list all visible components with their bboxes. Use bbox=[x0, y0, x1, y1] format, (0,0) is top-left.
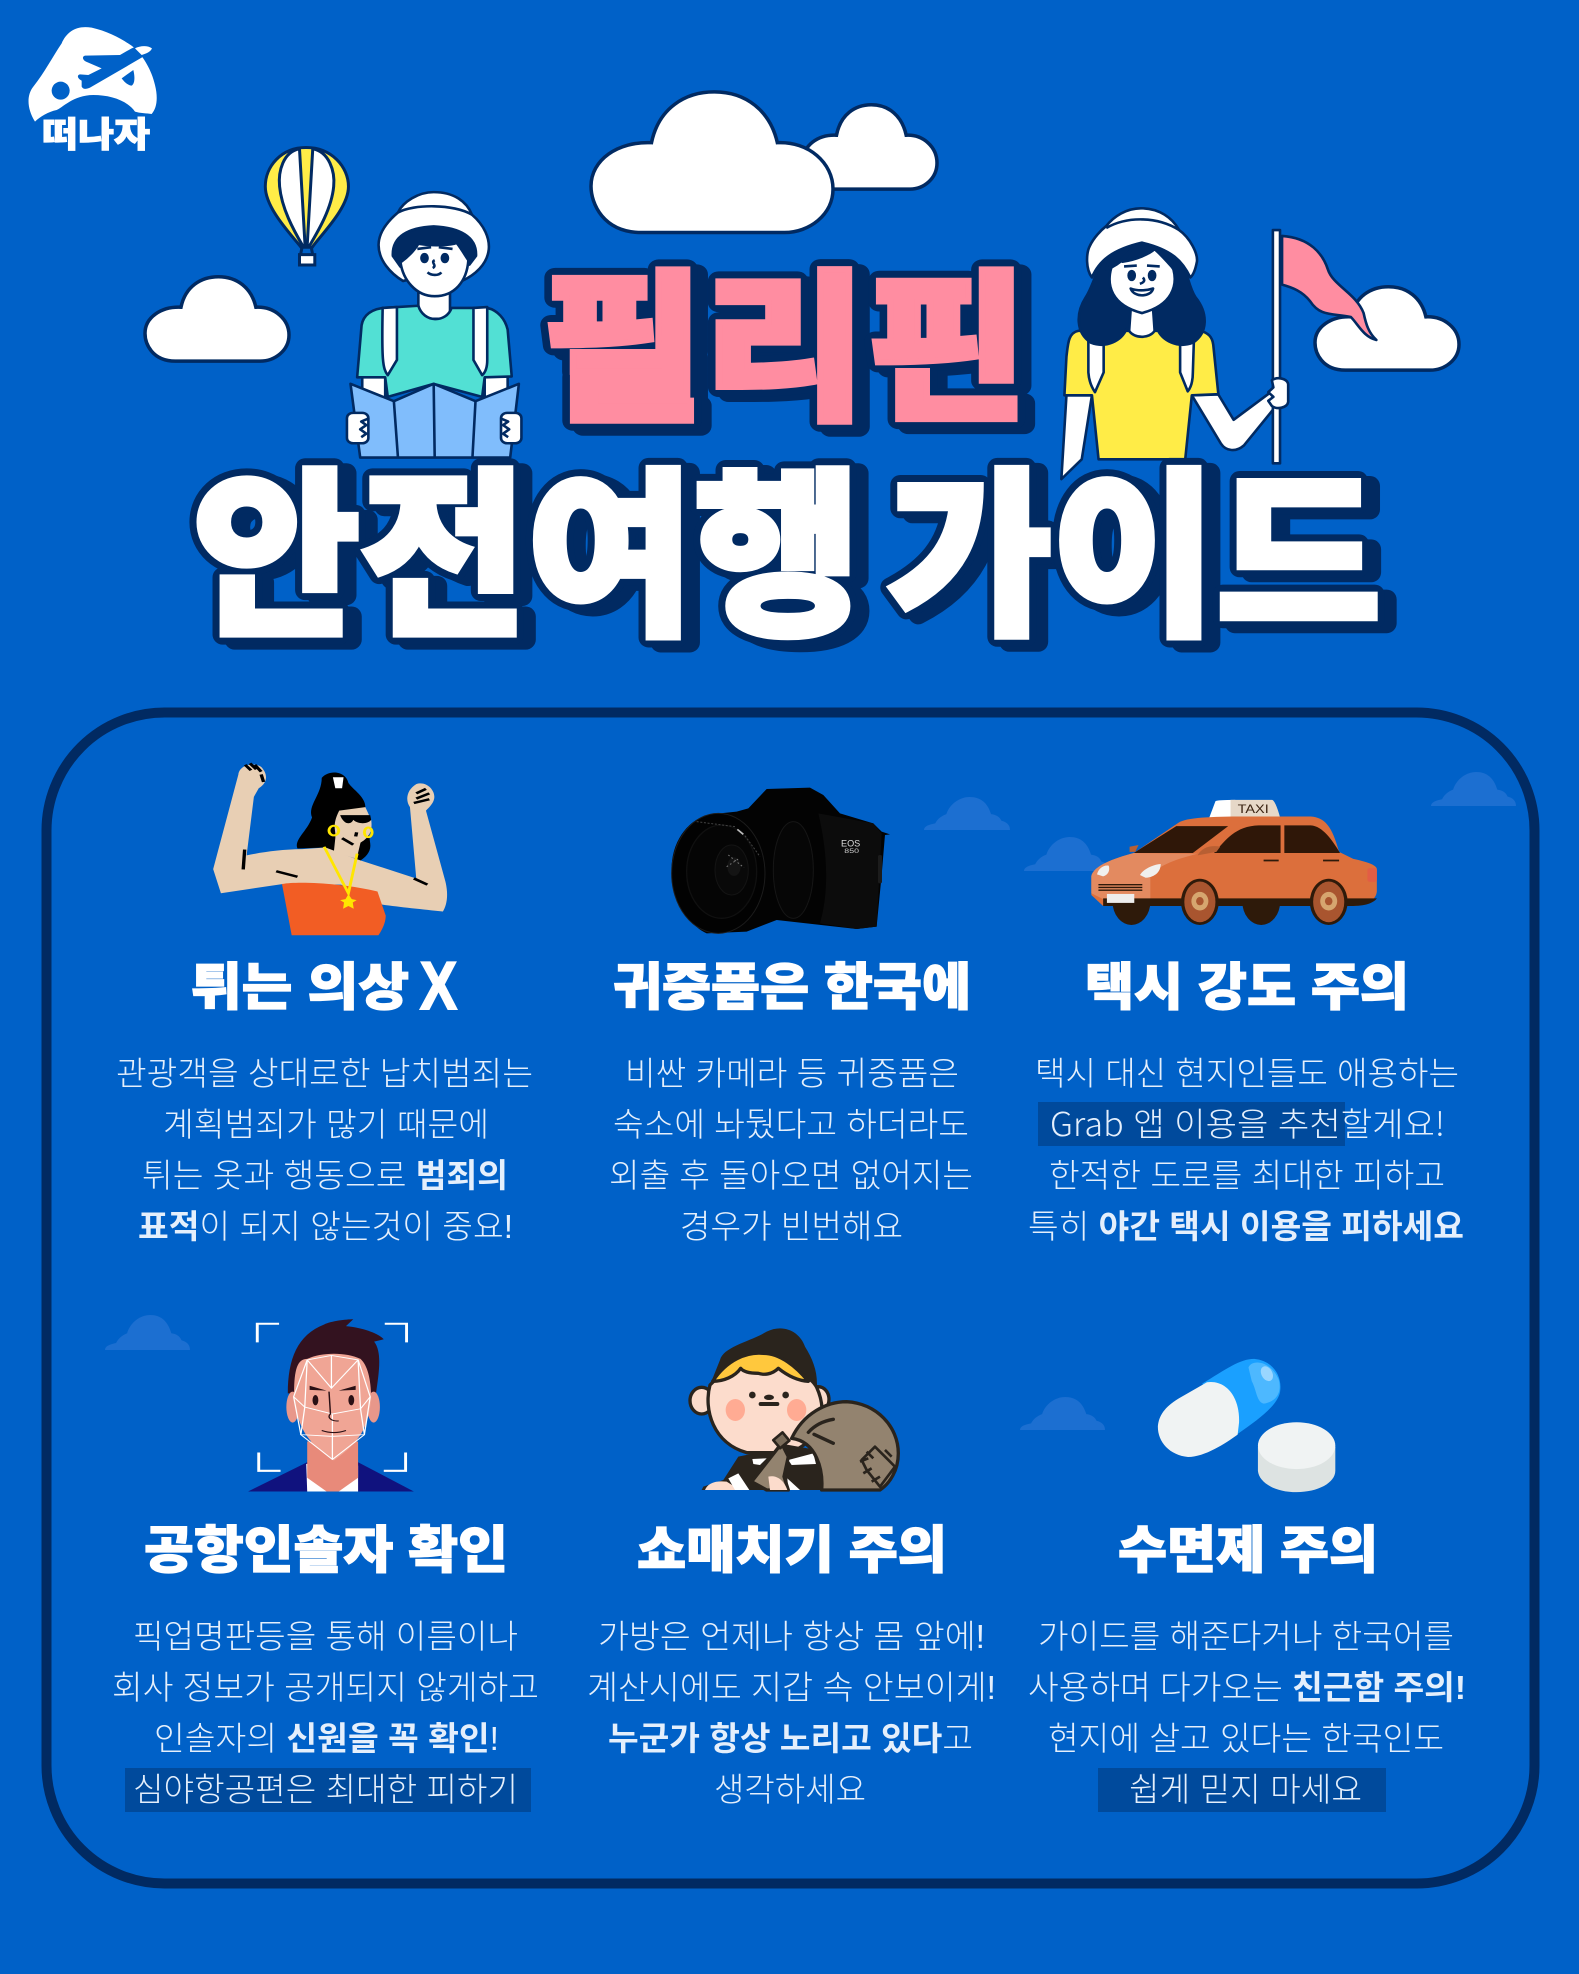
body text: 계산시에도 지갑 속 안보이게! bbox=[587, 1669, 996, 1706]
highlight bar bbox=[1098, 1768, 1386, 1812]
title: 필리핀: 필리핀 bbox=[542, 260, 1028, 441]
heading: 공항인솔자 확인 bbox=[144, 1522, 508, 1579]
body text: 관광객을 상대로한 납치범죄는 bbox=[116, 1055, 533, 1092]
body text: 경우가 빈번해요 bbox=[680, 1208, 903, 1245]
logo: 떠나자 bbox=[29, 27, 157, 155]
icon: camera: EOS bbox=[841, 839, 860, 849]
body text: 회사 정보가 공개되지 않게하고 bbox=[112, 1669, 539, 1706]
body text: 표적이 되지 않는것이 중요! bbox=[138, 1208, 513, 1245]
highlight bar: Grab bbox=[1038, 1102, 1345, 1146]
body text: 가이드를 해준다거나 한국어를 bbox=[1038, 1618, 1454, 1655]
body text: 튀는 옷과 행동으로 범죄의 bbox=[142, 1157, 508, 1194]
title: 필리핀: 필리핀 bbox=[542, 260, 1028, 441]
icon: pills bbox=[1158, 1359, 1335, 1492]
icon: hot air balloon bbox=[265, 147, 348, 265]
tip 1: flashy clothing bbox=[116, 763, 533, 1245]
icon: cloud left bbox=[145, 277, 289, 361]
icon: face recognition bbox=[248, 1319, 414, 1491]
body text: 택시 대신 현지인들도 애용하는 bbox=[1035, 1055, 1459, 1092]
body text: 계획범죄가 많기 때문에 bbox=[163, 1106, 489, 1143]
icon: thief with sack bbox=[690, 1328, 898, 1490]
icon: camera bbox=[672, 788, 890, 933]
body text: 비싼 카메라 등 귀중품은 bbox=[625, 1055, 959, 1092]
tip 3: taxi robbery bbox=[1028, 800, 1464, 1245]
body text: 특히 야간 택시 이용을 피하세요 bbox=[1028, 1208, 1464, 1245]
body text: 한적한 도로를 최대한 피하고 bbox=[1049, 1157, 1445, 1194]
body text: 외출 후 돌아오면 없어지는 bbox=[609, 1157, 973, 1194]
heading: 택시 강도 주의 bbox=[1085, 959, 1409, 1016]
body text: 현지에 살고 있다는 한국인도 bbox=[1048, 1720, 1444, 1757]
body text bbox=[112, 1618, 539, 1808]
icon: cloud right bbox=[1315, 287, 1459, 370]
title: 안전여행 가이드 bbox=[193, 458, 1393, 664]
body text bbox=[587, 1618, 996, 1808]
illustration: woman with flag bbox=[1061, 208, 1376, 479]
heading: 튀는 의상 bbox=[191, 959, 409, 1016]
logo: 떠나자: 떠나자 bbox=[42, 116, 150, 155]
icon: taxi bbox=[1091, 800, 1377, 925]
icon: taxi: TAXI bbox=[1238, 803, 1269, 816]
body text: 숙소에 놔뒀다고 하더라도 bbox=[613, 1106, 969, 1143]
title: 안전여행 가이드: 안전여행 bbox=[193, 458, 861, 659]
body text bbox=[1028, 1055, 1464, 1245]
icon: small cloud top bbox=[803, 105, 937, 189]
body text: 가방은 언제나 항상 몸 앞에! bbox=[598, 1618, 985, 1655]
heading: 쇼매치기 주의 bbox=[637, 1522, 947, 1579]
body text bbox=[609, 1055, 973, 1245]
body text bbox=[116, 1055, 533, 1245]
title: 필리핀: 필리핀 bbox=[552, 265, 1038, 446]
icon: big cloud top bbox=[591, 92, 833, 233]
title: 안전여행 가이드: 가이드 bbox=[887, 458, 1381, 659]
tip 5: pickpocket bbox=[587, 1328, 996, 1808]
illustration: man with map bbox=[347, 192, 521, 458]
highlight bar bbox=[125, 1768, 531, 1812]
heading: 귀중품은 한국에 bbox=[613, 959, 971, 1016]
body text: Grab 앱 이용을 추천할게요! bbox=[1050, 1098, 1445, 1146]
body text: 누군가 항상 노리고 있다고 bbox=[608, 1720, 973, 1757]
title: 안전여행 가이드: 안전여행 bbox=[193, 458, 861, 659]
body text: 인솔자의 신원을 꼭 확인! bbox=[154, 1720, 499, 1757]
body text bbox=[1028, 1618, 1466, 1808]
heading: 수면제 주의 bbox=[1118, 1522, 1378, 1579]
title: 안전여행 가이드: 가이드 bbox=[899, 463, 1393, 664]
tip 6: sleeping pills bbox=[1028, 1359, 1466, 1812]
tip 2: valuables bbox=[609, 788, 973, 1245]
body text: 사용하며 다가오는 친근함 주의! bbox=[1028, 1669, 1466, 1706]
title: 안전여행 가이드: 가이드 bbox=[887, 458, 1381, 659]
heading bbox=[191, 948, 457, 1024]
icon: camera: 850 bbox=[844, 849, 860, 855]
body text: 생각하세요 bbox=[714, 1771, 866, 1808]
panel: safety tips bbox=[46, 712, 1534, 1884]
body text: 쉽게 믿지 마세요 bbox=[1129, 1771, 1362, 1808]
title: 안전여행 가이드: 안전여행 bbox=[205, 463, 873, 664]
faint clouds bbox=[105, 772, 1516, 1430]
body text: 픽업명판등을 통해 이름이나 bbox=[133, 1618, 518, 1655]
body text: 심야항공편은 최대한 피하기 bbox=[133, 1771, 518, 1808]
tip 4: airport pickup bbox=[112, 1319, 539, 1812]
icon: dancing woman bbox=[213, 763, 447, 935]
heading: X bbox=[420, 948, 457, 1024]
